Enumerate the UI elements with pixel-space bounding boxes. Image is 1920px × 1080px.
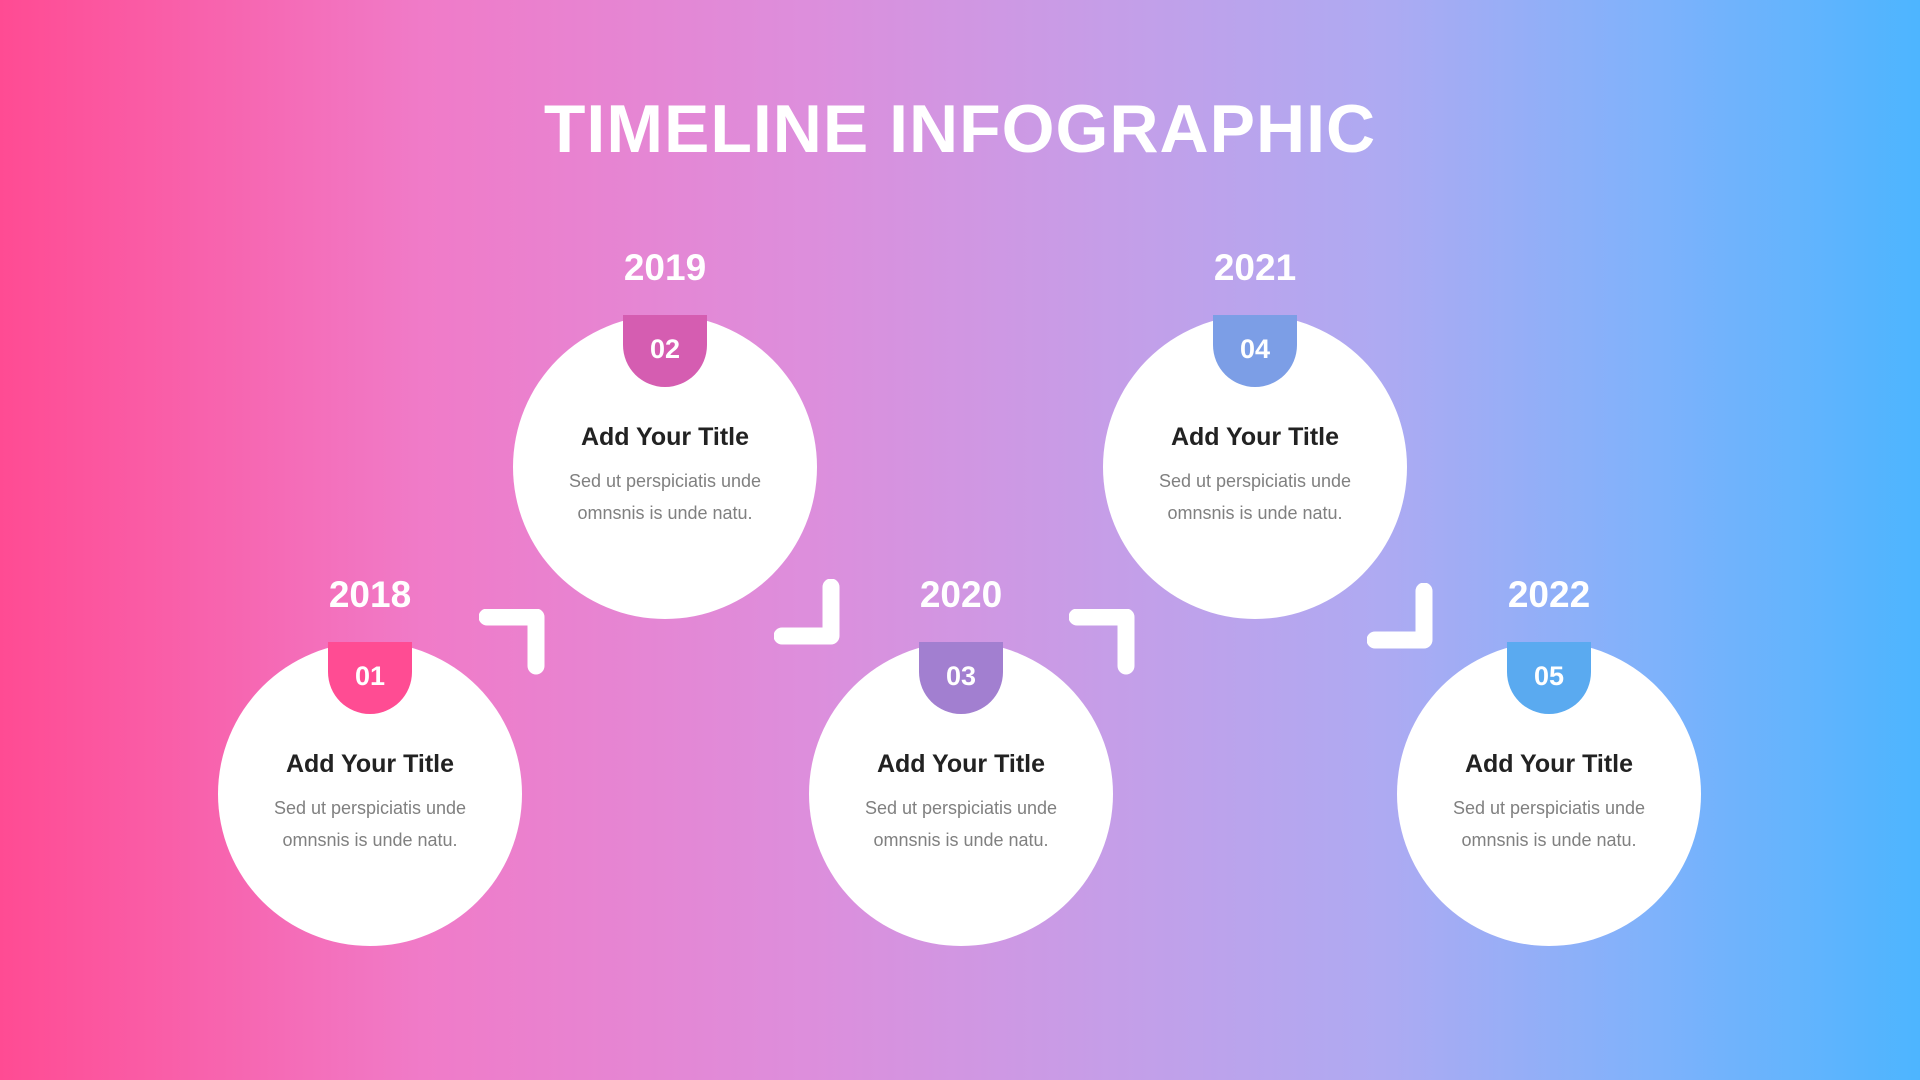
badge 02: 02 [650, 334, 680, 364]
text 5 [1453, 798, 1645, 850]
text 3: Sed ut perspiciatis unde [865, 798, 1057, 818]
badge 01 [328, 642, 412, 714]
item 1: 2018 [218, 574, 522, 946]
arrow 2 to 3 [774, 579, 840, 644]
circle 3 [809, 642, 1113, 946]
circle 2 [513, 315, 817, 619]
text 4 [1159, 471, 1351, 523]
arrow 4 to 5 [1367, 583, 1432, 648]
year 2021: 2021 [1214, 247, 1296, 288]
text 1: omnsnis is unde natu. [282, 830, 458, 850]
text 4: omnsnis is unde natu. [1167, 503, 1343, 523]
text 4: Sed ut perspiciatis unde [1159, 471, 1351, 491]
text 2: Sed ut perspiciatis unde [569, 471, 761, 491]
text 5: omnsnis is unde natu. [1461, 830, 1637, 850]
text 1 [274, 798, 466, 850]
text 3 [865, 798, 1057, 850]
badge 01: 01 [355, 661, 385, 691]
text 2: omnsnis is unde natu. [577, 503, 753, 523]
text 1: Sed ut perspiciatis unde [274, 798, 466, 818]
circle 4 [1103, 315, 1407, 619]
circle 5 [1397, 642, 1701, 946]
item 2: 2019 [513, 247, 817, 619]
badge 05 [1507, 642, 1591, 714]
heading 3: Add Your Title [877, 750, 1045, 778]
item 5: 2022 [1397, 574, 1701, 946]
heading 5: Add Your Title [1465, 750, 1633, 778]
text 3: omnsnis is unde natu. [873, 830, 1049, 850]
year 2019: 2019 [624, 247, 706, 288]
title: TIMELINE INFOGRAPHIC [544, 91, 1376, 167]
text 2 [569, 471, 761, 523]
item 4: 2021 [1103, 247, 1407, 619]
heading 2: Add Your Title [581, 423, 749, 451]
year 2020: 2020 [920, 574, 1002, 615]
heading 4: Add Your Title [1171, 423, 1339, 451]
badge 05: 05 [1534, 661, 1564, 691]
arrow 3 to 4 [1069, 609, 1134, 674]
year 2018: 2018 [329, 574, 411, 615]
arrow 1 to 2 [479, 609, 544, 674]
circle 1 [218, 642, 522, 946]
badge 03 [919, 642, 1003, 714]
badge 04: 04 [1240, 334, 1270, 364]
year 2022: 2022 [1508, 574, 1590, 615]
badge 03: 03 [946, 661, 976, 691]
item 3: 2020 [809, 574, 1113, 946]
badge 04 [1213, 315, 1297, 387]
heading 1: Add Your Title [286, 750, 454, 778]
badge 02 [623, 315, 707, 387]
text 5: Sed ut perspiciatis unde [1453, 798, 1645, 818]
